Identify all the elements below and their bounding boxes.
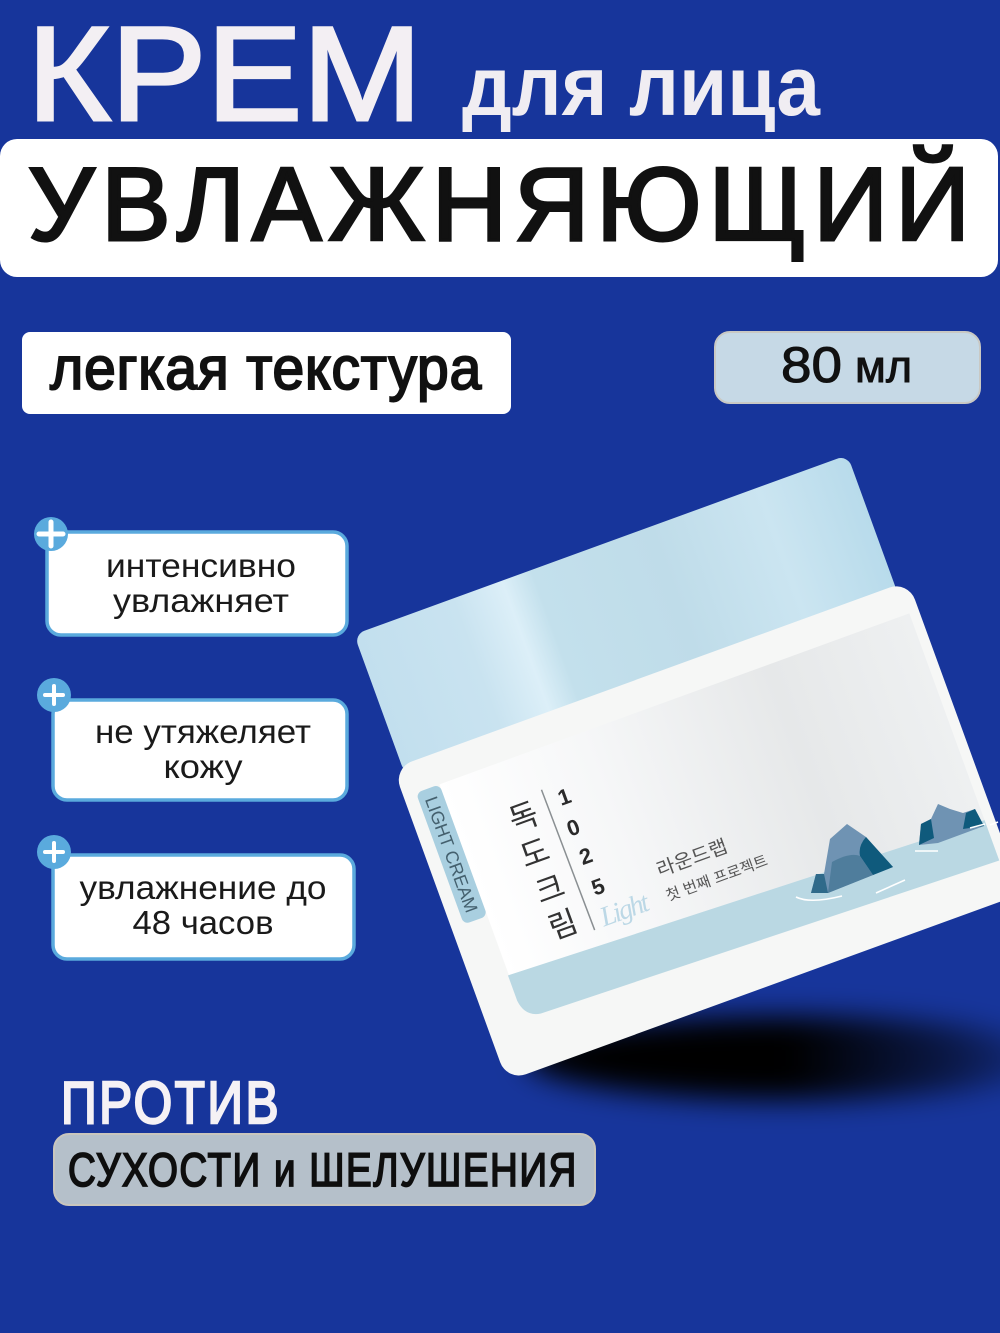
jar shadow [525,1016,1000,1100]
korean product name: 림 [544,904,582,946]
korean brand text [654,824,770,905]
korean product name: 크 [531,868,569,911]
heading: против: ПРОТИВ [61,1070,279,1136]
icon: plus 2 [37,678,71,712]
number 1025: 2 [576,842,596,870]
illustration: small island [919,804,984,845]
korean brand text: 라운드랩 [654,835,731,881]
korean brand text: 첫 번째 프로젝트 [664,852,770,905]
benefit card 1: увлажняет [113,582,289,619]
number 1025: 0 [563,814,583,842]
divider [541,789,595,931]
korean product name: 도 [515,832,554,875]
number 1025: 1 [554,783,574,811]
jar lid [354,455,899,775]
tag: light cream: LIGHT CREAM [421,794,481,915]
title: КРЕМ: КРЕМ [27,0,422,149]
korean product name [502,796,582,947]
benefit card 3: 48 часов [132,904,274,941]
korean product name: 독 [504,796,543,838]
badge: 80 мл: мл [855,341,912,392]
illustration: big island [811,824,893,893]
script: Light: Light [595,887,655,934]
benefit card 2: кожу [164,748,243,785]
badge: 80 мл: 80 [781,337,842,393]
badge: 80 мл [715,332,980,403]
badge: легкая текстура: легкая текстура [50,336,482,402]
badge: сухости и шелушения [54,1134,595,1205]
jar body [393,581,1000,1081]
number 1025: 5 [588,873,608,901]
label band [508,804,999,1032]
benefit card 3: увлажнение до [80,869,326,906]
benefit card 1 [34,517,347,635]
jar label [439,613,989,1002]
benefit card 1: интенсивно [106,547,296,584]
badge: сухости и шелушения: СУХОСТИ и ШЕЛУШЕНИЯ [68,1144,576,1197]
benefit card 3 [37,835,354,959]
benefit card 2 [37,678,347,800]
water ripples [796,822,998,900]
icon: plus 1 [34,517,68,551]
banner: увлажняющий: УВЛАЖНЯЮЩИЙ [28,145,970,263]
number 1025 [552,783,608,902]
icon: plus 3 [37,835,71,869]
subtitle: для лица: для лица [462,39,821,133]
benefit card 2: не утяжеляет [95,713,311,750]
product: cream jar [346,450,1000,1081]
